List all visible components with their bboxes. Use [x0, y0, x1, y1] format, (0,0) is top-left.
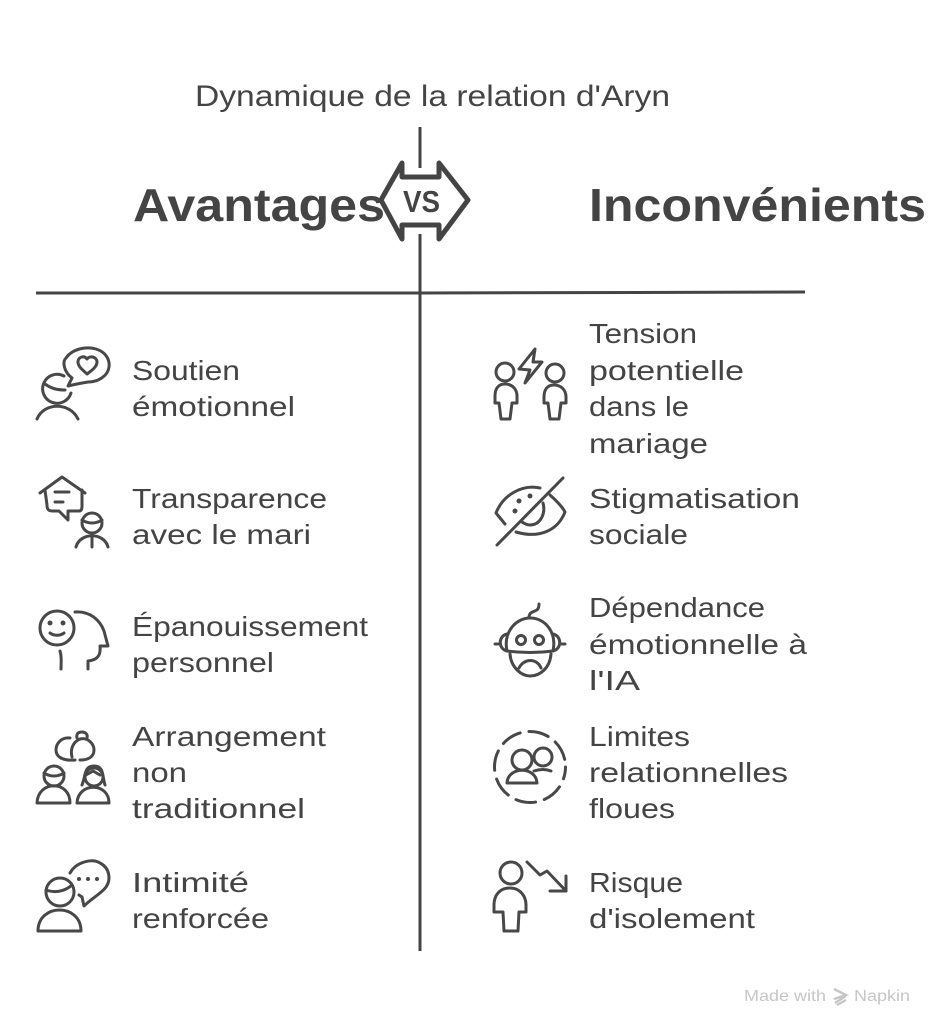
text: Arrangement	[132, 721, 326, 752]
icon: smile and head profile	[40, 611, 108, 669]
item: dépendance	[495, 592, 808, 696]
item: épanouissement	[40, 611, 368, 678]
icon: person with heart bubble	[37, 348, 109, 419]
item: soutien émotionnel	[37, 348, 295, 422]
text: émotionnelle à	[589, 629, 808, 660]
item: limites	[494, 721, 788, 824]
icon: house bubble and person	[40, 477, 108, 547]
footer: made with napkin: Napkin	[854, 988, 910, 1005]
text: potentielle	[589, 355, 744, 386]
text: Stigmatisation	[589, 483, 800, 514]
icon: two people and lightning	[495, 349, 566, 419]
text: floues	[589, 793, 675, 824]
text: émotionnel	[132, 391, 295, 422]
icon: person and chat bubble	[38, 861, 109, 931]
icon: dashed circle with people	[494, 732, 566, 802]
text: d'isolement	[589, 903, 755, 934]
text: l'IA	[589, 665, 640, 696]
text: mariage	[589, 428, 708, 459]
text: renforcée	[132, 903, 269, 934]
icon: robot	[495, 604, 565, 676]
text: Dépendance	[589, 592, 765, 623]
panel: avantages	[37, 348, 368, 934]
text: personnel	[132, 647, 274, 678]
heading: Inconvénients: Inconvénients	[589, 179, 926, 231]
text: Intimité	[132, 867, 249, 898]
item: tension	[495, 318, 744, 459]
text: relationnelles	[589, 757, 788, 788]
text: Limites	[589, 721, 690, 752]
text: Risque	[589, 867, 683, 898]
text: sociale	[589, 519, 688, 550]
title: Dynamique de la relation d'Aryn	[195, 80, 670, 113]
text: traditionnel	[132, 793, 305, 824]
text: non	[132, 757, 187, 788]
item: risque	[494, 862, 755, 934]
text: Soutien	[132, 355, 240, 386]
panel: inconvénients	[494, 318, 808, 934]
text: dans le	[589, 391, 689, 422]
heading: Avantages: Avantages	[133, 179, 385, 231]
text: Transparence	[132, 483, 327, 514]
item: transparence	[40, 477, 327, 550]
icon: crossed eye	[496, 478, 565, 545]
text: Épanouissement	[132, 611, 368, 642]
item: stigmatisation	[496, 478, 800, 550]
text: Tension	[589, 318, 697, 349]
footer: made with napkin: Made with	[744, 988, 826, 1005]
vs badge: VS	[403, 184, 440, 219]
icon: napkin logo	[834, 989, 846, 1005]
text: avec le mari	[132, 519, 311, 550]
icon: person with falling arrow	[494, 862, 566, 931]
vs badge	[381, 163, 468, 239]
item: arrangement	[37, 721, 326, 824]
icon: couple with rings	[37, 732, 109, 803]
item: intimité	[38, 861, 269, 934]
footer: made with napkin	[744, 988, 910, 1005]
